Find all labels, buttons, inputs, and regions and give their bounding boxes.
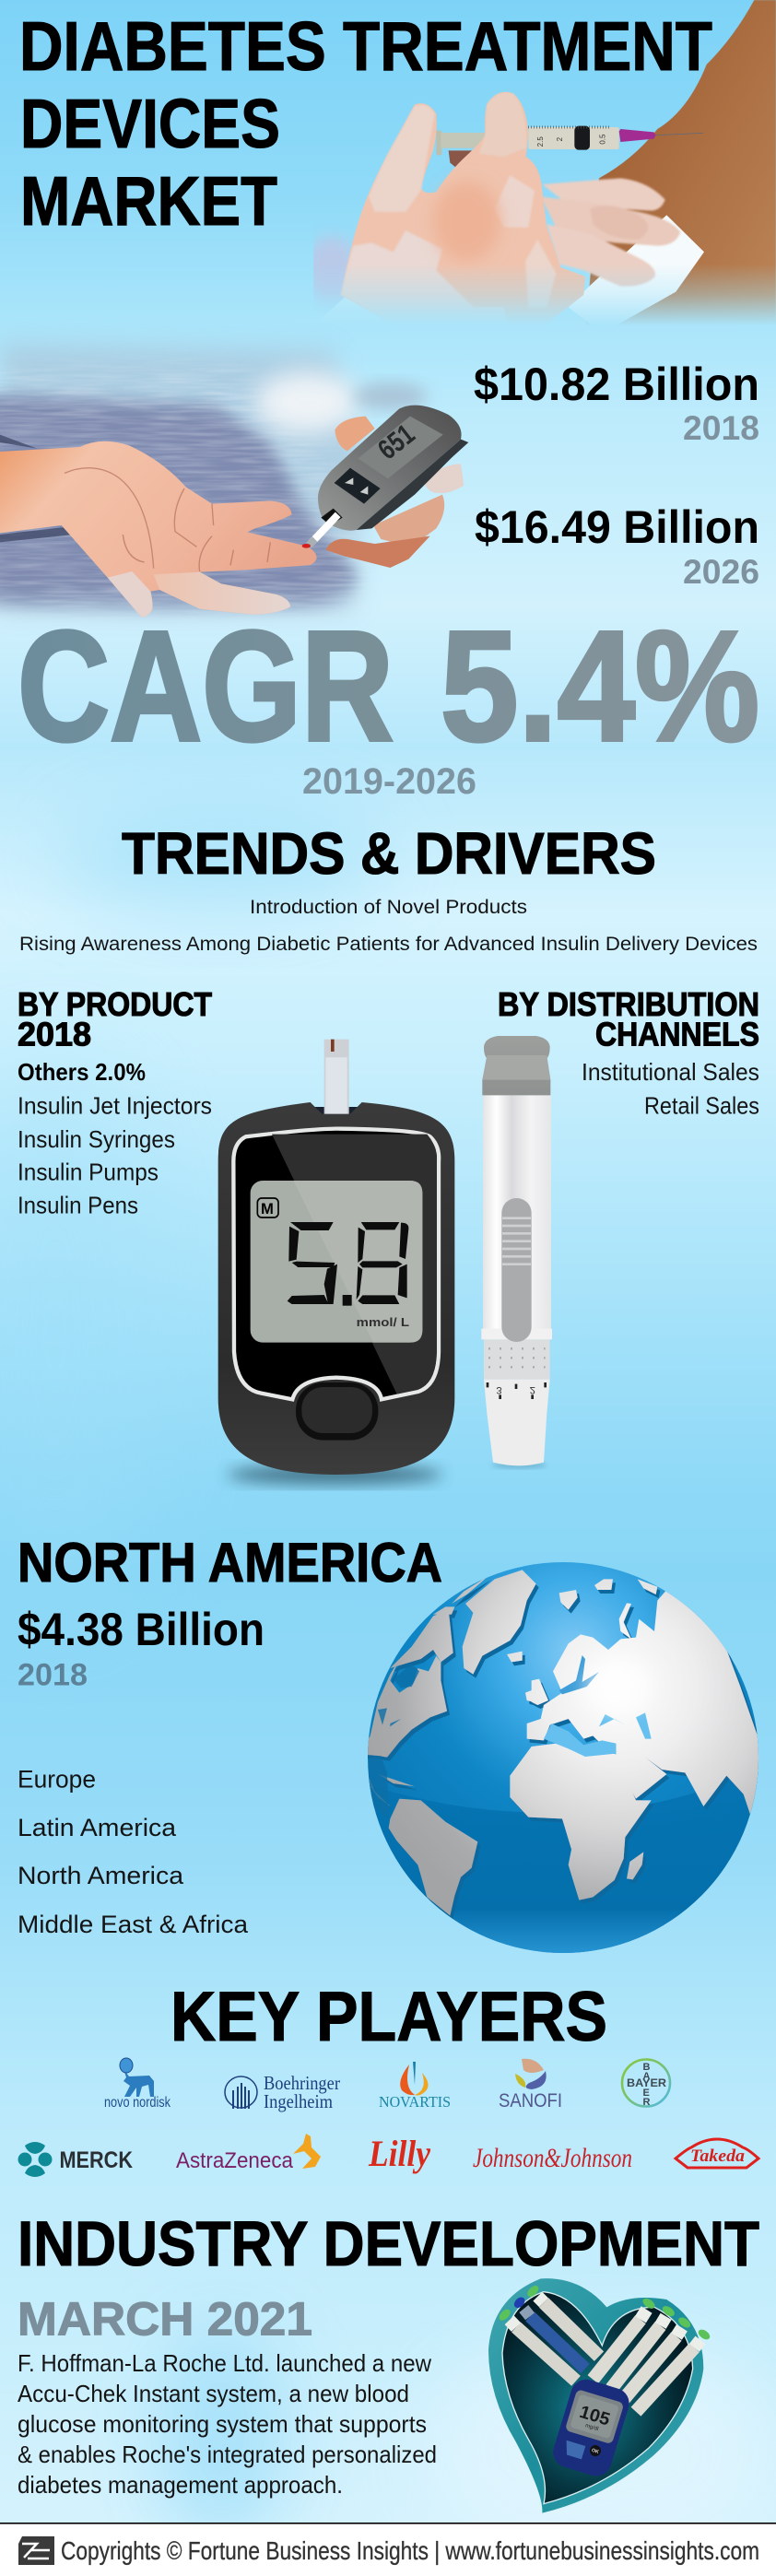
footer: [0, 2523, 776, 2576]
region list: Europe: [18, 1766, 96, 1794]
logo: Bayer: BAYER: [627, 2078, 667, 2089]
by product list: Insulin Syringes: [18, 1125, 175, 1153]
market value 2018: 2018: [683, 409, 759, 447]
region list: North America: [18, 1862, 184, 1889]
logo: Merck: MERCK: [59, 2147, 133, 2173]
small meter: [549, 2376, 633, 2480]
by distribution channels list: Institutional Sales: [582, 1058, 759, 1086]
logo: Novartis: [379, 2062, 451, 2111]
CAGR: CAGR: [18, 599, 394, 774]
logo: Sanofi: SANOFI: [499, 2090, 562, 2111]
main hand: [341, 92, 585, 338]
small meter: 105: [577, 2403, 612, 2430]
CAGR: 2019-2026: [302, 761, 476, 802]
by product list: 2018: [18, 1016, 91, 1053]
footer logo: [18, 2536, 54, 2565]
logo: Lilly: Lilly: [368, 2133, 430, 2174]
market value 2018: [474, 359, 759, 447]
logo: Merck: [18, 2142, 133, 2177]
CAGR: [18, 599, 759, 802]
by product list: Insulin Pumps: [18, 1158, 159, 1185]
icon: heart dish with insulin pens and meter: [488, 2278, 711, 2513]
logo: Bayer: E: [643, 2088, 650, 2099]
handheld glucose meter: [302, 406, 468, 548]
test strip: [313, 1040, 361, 1116]
development text: glucose monitoring system that supports: [18, 2410, 427, 2438]
key players heading: KEY PLAYERS: [170, 1978, 607, 2056]
holding fingers behind device: [335, 417, 375, 451]
trends and drivers: Rising Awareness Among Diabetic Patients for Advanced Insulin Delivery Devices: [19, 934, 758, 955]
title: DEVICES: [20, 85, 280, 162]
region list: [18, 1766, 249, 1938]
syringe: [436, 126, 703, 155]
development text: diabetes management approach.: [18, 2471, 343, 2499]
by product list: Insulin Jet Injectors: [18, 1091, 212, 1119]
by product list: Others 2.0%: [18, 1058, 146, 1086]
logo: Boehringer Ingelheim: [225, 2072, 340, 2112]
small meter: mg/dl: [584, 2423, 599, 2432]
trends and drivers: TRENDS & DRIVERS: [122, 820, 656, 887]
by product list: Insulin Pens: [18, 1191, 138, 1218]
development text: & enables Roche's integrated personalized: [18, 2441, 437, 2468]
north america heading: 2018: [18, 1657, 88, 1692]
trends and drivers: [19, 820, 758, 955]
by distribution channels list: CHANNELS: [595, 1016, 759, 1053]
by product list: [18, 985, 212, 1218]
title: MARKET: [20, 162, 277, 240]
logo: Sanofi: [499, 2059, 562, 2111]
logo: Boehringer Ingelheim: Boehringer: [264, 2072, 340, 2094]
north america heading: NORTH AMERICA: [18, 1532, 442, 1594]
by distribution channels list: [498, 985, 759, 1119]
LCD display: mmol/ L: [357, 1316, 409, 1329]
by product list: BY PRODUCT: [18, 985, 212, 1023]
LCD display: [251, 1181, 422, 1343]
syringe: 2.5: [536, 136, 545, 147]
logo: Novartis: NOVARTIS: [379, 2093, 451, 2111]
icon: blood glucose meter and lancing pen: [218, 1036, 552, 1485]
region list: Middle East & Africa: [18, 1911, 249, 1938]
meter body: [218, 1102, 454, 1475]
title: [19, 7, 712, 240]
market value 2026: 2026: [683, 553, 759, 591]
logo: AstraZeneca: [176, 2134, 321, 2173]
photo: hand with finger-prick glucose test: [0, 332, 468, 624]
patient hand: [0, 441, 317, 617]
market value 2026: [475, 501, 759, 591]
logo: Bayer: A: [643, 2071, 651, 2082]
small meter: OK: [591, 2448, 600, 2455]
north america heading: [18, 1532, 442, 1692]
meter button: [296, 1382, 378, 1441]
trends and drivers: Introduction of Novel Products: [250, 897, 527, 918]
logo: Takeda: Takeda: [690, 2147, 746, 2166]
by distribution channels list: Retail Sales: [644, 1091, 759, 1119]
market value 2018: $10.82 Billion: [474, 359, 759, 410]
logo: Bayer: B: [643, 2062, 651, 2073]
development text: F. Hoffman-La Roche Ltd. launched a new: [18, 2349, 431, 2377]
lower fingers on tissue: [541, 178, 680, 287]
photo: gloved hands giving an injection: [304, 0, 776, 350]
logo: Takeda: [676, 2139, 758, 2168]
development text: [18, 2349, 437, 2499]
syringe: 0.5: [599, 134, 607, 145]
logo: novo nordisk: novo nordisk: [104, 2095, 171, 2111]
logo: novo nordisk: [104, 2058, 171, 2111]
meter face: [233, 1129, 439, 1399]
lancing pen: 2: [530, 1384, 535, 1395]
logo: Boehringer Ingelheim: Ingelheim: [264, 2090, 333, 2112]
logo: Johnson & Johnson: Johnson&Johnson: [473, 2143, 632, 2173]
logo: Bayer: [622, 2059, 670, 2108]
handheld glucose meter: 651: [372, 418, 420, 465]
LCD display: M: [261, 1200, 274, 1217]
market value 2026: $16.49 Billion: [475, 501, 759, 553]
lancing pen: [481, 1036, 552, 1465]
region list: Latin America: [18, 1814, 177, 1841]
lancing pen: 3: [496, 1384, 502, 1395]
pens: [497, 2284, 711, 2412]
north america heading: $4.38 Billion: [18, 1604, 265, 1655]
icon: globe: [359, 1562, 765, 1957]
development text: Accu-Chek Instant system, a new blood: [18, 2380, 409, 2407]
syringe: 2: [556, 136, 564, 141]
development date: MARCH 2021: [18, 2293, 312, 2345]
logo: AstraZeneca: AstraZeneca: [176, 2148, 294, 2173]
logo: Bayer: R: [643, 2097, 651, 2108]
